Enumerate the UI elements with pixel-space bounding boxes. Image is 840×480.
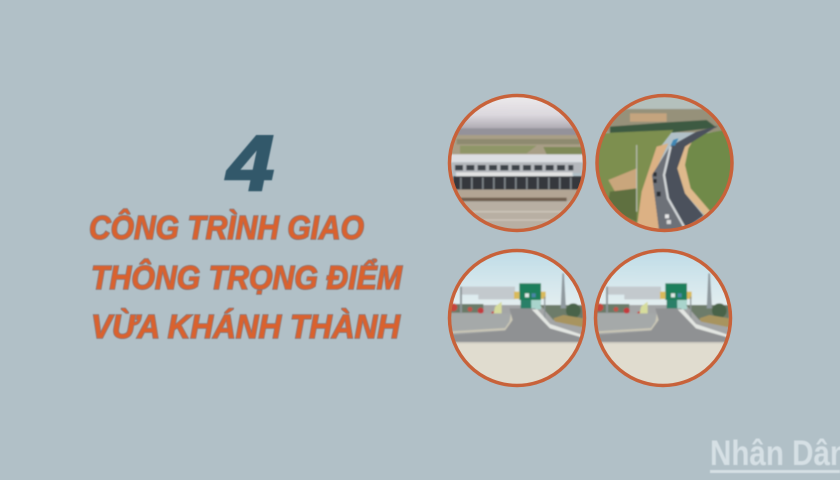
photo circle: interchange right	[594, 248, 732, 388]
photo circle: airport terminal	[448, 94, 586, 232]
heading line 1: CÔNG TRÌNH GIAO	[89, 208, 364, 246]
infographic canvas	[89, 94, 840, 474]
heading	[89, 208, 403, 345]
heading line 2: THÔNG TRỌNG ĐIỂM	[91, 258, 403, 296]
photo circle: interchange left	[448, 248, 586, 388]
photo circle: highway	[593, 92, 740, 232]
big number 4: 4	[225, 119, 274, 207]
heading line 3: VỪA KHÁNH THÀNH	[91, 308, 401, 345]
